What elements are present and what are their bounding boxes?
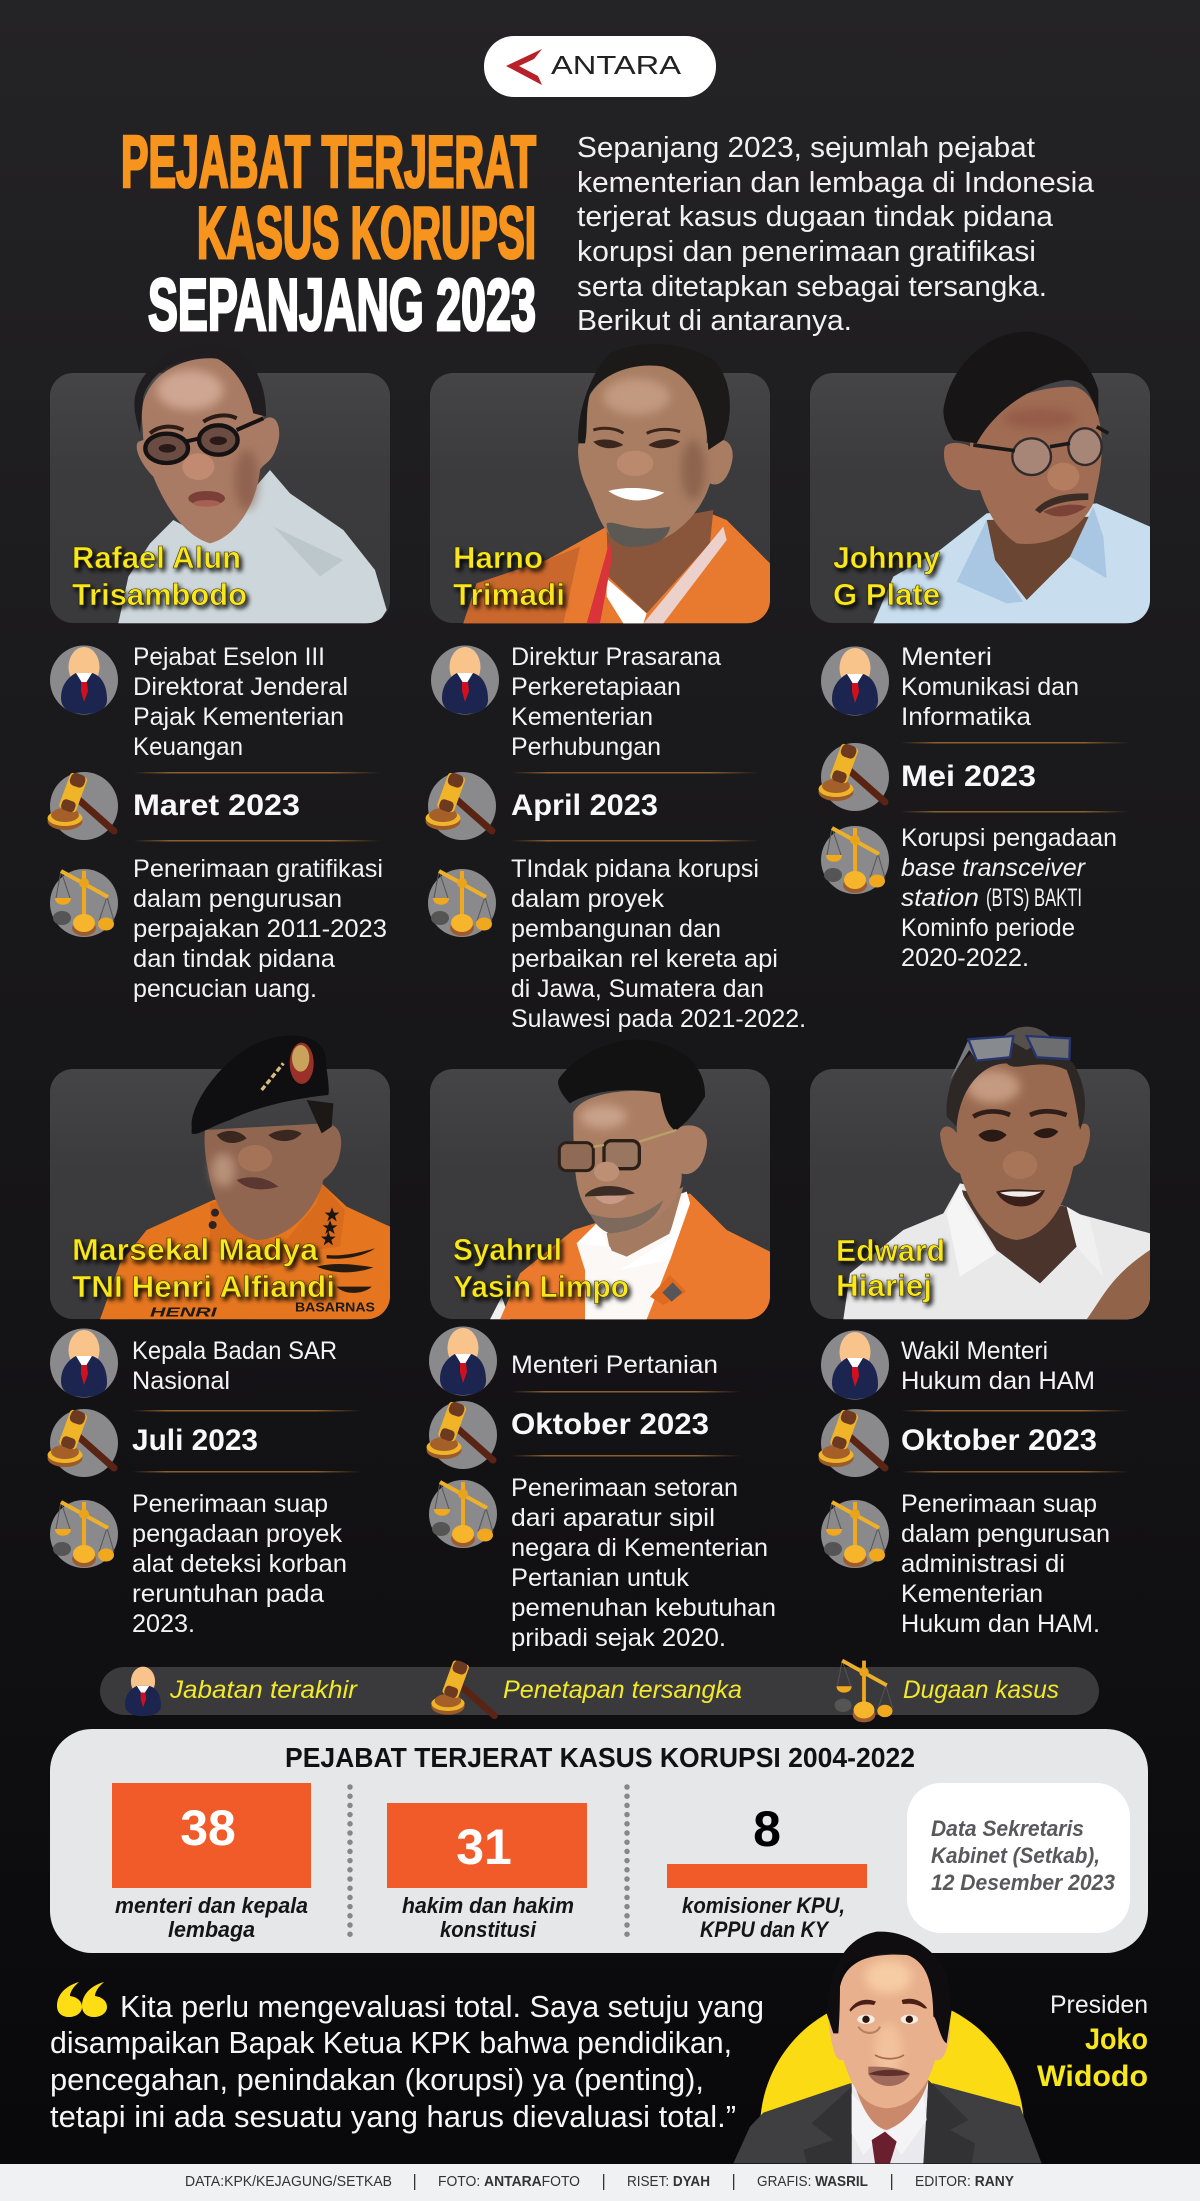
- photo: Syahrul: [490, 1069, 770, 1320]
- bar: 8: 8: [753, 1801, 781, 1857]
- bar: 31: hakim dan hakim: [402, 1893, 574, 1918]
- case: negara di Kementerian: [511, 1534, 768, 1562]
- logo: ANTARA: [484, 36, 716, 97]
- legend label: suspect: Penetapan tersangka: [503, 1676, 742, 1704]
- icon: scales: [821, 826, 889, 894]
- name: Trimadi: [453, 577, 565, 612]
- case: pribadi sejak 2020.: [511, 1624, 726, 1652]
- case: pengadaan proyek: [132, 1520, 342, 1548]
- case: [133, 855, 387, 1003]
- case: perpajakan 2011-2023: [133, 915, 387, 943]
- name: [72, 1232, 335, 1304]
- quote text: tetapi ini ada sesuatu yang harus dievaluasi total.”: [50, 2100, 736, 2134]
- date: April 2023: [511, 789, 658, 822]
- position: Nasional: [132, 1367, 230, 1395]
- title: [121, 122, 536, 346]
- intro text: terjerat kasus dugaan tindak pidana: [577, 201, 1054, 233]
- case: Penerimaan suap: [901, 1490, 1097, 1518]
- position: Pajak Kementerian: [133, 703, 344, 731]
- icon: person: [50, 1328, 118, 1398]
- position: Wakil Menteri: [901, 1337, 1048, 1365]
- case: base transceiver: [901, 854, 1087, 882]
- portrait: Joko Widodo: [734, 1932, 1042, 2164]
- case: alat deteksi korban: [132, 1550, 347, 1578]
- name: Marsekal Madya: [72, 1232, 319, 1267]
- icon: person: [821, 646, 889, 716]
- name: [453, 1232, 629, 1304]
- icon: gavel: [426, 1400, 497, 1469]
- icon: scales: [50, 1500, 118, 1568]
- name: [72, 540, 247, 612]
- name: Johnny: [833, 540, 941, 575]
- details: Harno: [426, 643, 806, 1033]
- name: Yasin Limpo: [453, 1269, 629, 1304]
- details: Syahrul: [426, 1326, 776, 1652]
- position: Kepala Badan SAR: [132, 1337, 337, 1365]
- icon: gavel: [48, 771, 118, 840]
- name: [836, 1233, 945, 1303]
- panel: Johnny G Plate: [810, 332, 1150, 623]
- case: [132, 1490, 347, 1638]
- icon: gavel: [426, 771, 496, 840]
- icon: person: [821, 1330, 889, 1400]
- title: SEPANJANG 2023: [148, 265, 536, 346]
- bar: 38: 38: [180, 1800, 236, 1856]
- card background: [50, 373, 390, 623]
- case: dalam pengurusan: [133, 885, 342, 913]
- details: Johnny: [818, 643, 1129, 972]
- quote text: pencegahan, penindakan (korupsi) ya (penting),: [50, 2063, 704, 2097]
- date: Oktober 2023: [901, 1424, 1097, 1457]
- position: Direktorat Jenderal: [133, 673, 348, 701]
- icon: quote mark: [57, 1982, 107, 2017]
- case: pencucian uang.: [133, 975, 317, 1003]
- source box: Data Sekretaris: [931, 1816, 1084, 1841]
- case: pemenuhan kebutuhan: [511, 1594, 776, 1622]
- intro text: kementerian dan lembaga di Indonesia: [577, 167, 1095, 199]
- case: Penerimaan setoran: [511, 1474, 738, 1502]
- footer credits: RISET: DYAH: [627, 2174, 710, 2190]
- position: Perhubungan: [511, 733, 661, 761]
- icon: person: [429, 1326, 497, 1396]
- case: Penerimaan suap: [132, 1490, 328, 1518]
- position: Pejabat Eselon III: [133, 643, 325, 671]
- logo: ANTARA: ANTARA: [551, 50, 682, 80]
- icon: scales: [821, 1500, 889, 1568]
- name: Rafael Alun: [72, 540, 241, 575]
- bar: 8: KPPU dan KY: [700, 1917, 830, 1942]
- panel: Harno Trimadi: [430, 344, 770, 623]
- bar: 31: konstitusi: [440, 1917, 537, 1942]
- photo: Edward: [843, 1027, 1150, 1319]
- case: station: [901, 884, 979, 912]
- case: Hukum dan HAM.: [901, 1610, 1100, 1638]
- card background: [810, 1069, 1150, 1319]
- position: Informatika: [901, 703, 1031, 731]
- source box: [907, 1783, 1130, 1933]
- case: Kominfo periode: [901, 914, 1075, 942]
- icon: scales: [429, 1480, 497, 1548]
- panel: Henri Alfiandi: [50, 1036, 390, 1320]
- position: [901, 643, 1079, 731]
- icon: scales: [428, 869, 496, 937]
- case: 2020-2022.: [901, 944, 1029, 972]
- bar: 38: menteri dan kepala: [115, 1893, 308, 1918]
- intro text: serta ditetapkan sebagai tersangka.: [577, 271, 1047, 303]
- panel: Rafael Alun Trisambodo: [50, 343, 390, 623]
- card background: [810, 373, 1150, 623]
- case: Penerimaan gratifikasi: [133, 855, 383, 883]
- date: Mei 2023: [901, 760, 1036, 793]
- card background: [430, 373, 770, 623]
- case: perbaikan rel kereta api: [511, 945, 778, 973]
- name: Hiariej: [836, 1268, 932, 1303]
- legend icon: scales: [835, 1661, 892, 1722]
- icon: scales: [50, 869, 118, 937]
- name: TNI Henri Alfiandi: [72, 1269, 335, 1304]
- position: Komunikasi dan: [901, 673, 1079, 701]
- photo: Henri: BASARNAS: [295, 1301, 375, 1315]
- details: Edward: [818, 1330, 1129, 1638]
- bar: 38: [112, 1783, 311, 1942]
- name: Syahrul: [453, 1232, 562, 1267]
- icon: gavel: [818, 1408, 889, 1477]
- name: [453, 540, 565, 612]
- legend bar: [100, 1659, 1099, 1722]
- date: Maret 2023: [133, 789, 300, 822]
- position: [901, 1337, 1095, 1395]
- legend icon: person: [125, 1667, 161, 1716]
- icon: gavel: [48, 1408, 118, 1477]
- name: G Plate: [833, 577, 940, 612]
- legend label: case: Dugaan kasus: [903, 1676, 1059, 1704]
- intro text: Sepanjang 2023, sejumlah pejabat: [577, 132, 1035, 164]
- footer credits: DATA:KPK/KEJAGUNG/SETKAB: [185, 2174, 392, 2190]
- case: Kementerian: [901, 1580, 1043, 1608]
- quote text: [50, 1990, 764, 2134]
- legend label: position: Jabatan terakhir: [169, 1676, 359, 1704]
- case: dalam proyek: [511, 885, 665, 913]
- details: Rafael: [48, 643, 387, 1003]
- panel: statistics 2004-2022: [50, 1729, 1148, 1953]
- case: dari aparatur sipil: [511, 1504, 715, 1532]
- case: [511, 1474, 776, 1652]
- date: Oktober 2023: [511, 1408, 709, 1441]
- case: pembangunan dan: [511, 915, 721, 943]
- photo: Johnny: [873, 332, 1150, 623]
- position: [132, 1337, 337, 1395]
- position: [511, 643, 721, 761]
- case: Korupsi pengadaan: [901, 824, 1117, 852]
- bar: 38: lembaga: [168, 1917, 255, 1942]
- case: dalam pengurusan: [901, 1520, 1110, 1548]
- photo: Rafael: [118, 343, 387, 623]
- position: Menteri: [901, 643, 992, 671]
- source box: 12 Desember 2023: [931, 1870, 1115, 1895]
- photo: Henri: [100, 1036, 390, 1320]
- position: Perkeretapiaan: [511, 673, 681, 701]
- icon: person: [431, 646, 499, 714]
- footer credits: [0, 2164, 1200, 2201]
- speaker name: Joko: [1085, 2023, 1148, 2056]
- position: Menteri Pertanian: [511, 1351, 718, 1379]
- position: Kementerian: [511, 703, 653, 731]
- title: PEJABAT TERJERAT: [121, 122, 536, 203]
- speaker name: [1037, 1991, 1148, 2093]
- footer credits: EDITOR: RANY: [915, 2174, 1014, 2190]
- footer credits: FOTO: ANTARAFOTO: [438, 2174, 580, 2190]
- icon: gavel: [818, 742, 889, 811]
- icon: person: [50, 646, 118, 714]
- bar: 8: komisioner KPU,: [682, 1893, 845, 1918]
- position: Hukum dan HAM: [901, 1367, 1095, 1395]
- name: Harno: [453, 540, 543, 575]
- case: [901, 824, 1117, 972]
- card background: [430, 1069, 770, 1319]
- name: Edward: [836, 1233, 945, 1268]
- bar: 31: 31: [456, 1819, 512, 1875]
- panel: Edward Hiariej: [810, 1027, 1150, 1319]
- case: dan tindak pidana: [133, 945, 335, 973]
- case: 2023.: [132, 1610, 195, 1638]
- position: [133, 643, 348, 761]
- bar: 31: [387, 1803, 587, 1942]
- name: [833, 540, 941, 612]
- speaker name: Widodo: [1037, 2060, 1148, 2093]
- case: di Jawa, Sumatera dan: [511, 975, 764, 1003]
- speaker name: Presiden: [1050, 1991, 1148, 2019]
- case: [901, 1490, 1110, 1638]
- case: (BTS) BAKTI: [986, 884, 1082, 912]
- panel: Syahrul Yasin Limpo: [430, 1069, 770, 1320]
- intro text: [577, 132, 1095, 337]
- photo: Harno: [463, 344, 770, 623]
- quote text: disampaikan Bapak Ketua KPK bahwa pendidikan,: [50, 2026, 732, 2060]
- case: administrasi di: [901, 1550, 1065, 1578]
- case: reruntuhan pada: [132, 1580, 324, 1608]
- legend icon: gavel: [431, 1659, 494, 1716]
- quote text: Kita perlu mengevaluasi total. Saya setuju yang: [120, 1990, 764, 2024]
- heading: PEJABAT TERJERAT KASUS KORUPSI 2004-2022: [285, 1742, 915, 1773]
- date: Juli 2023: [132, 1424, 258, 1457]
- source box: Kabinet (Setkab),: [931, 1843, 1100, 1868]
- case: TIndak pidana korupsi: [511, 855, 759, 883]
- case: [511, 855, 806, 1033]
- photo: Henri: HENRI: [150, 1306, 217, 1320]
- footer credits: GRAFIS: WASRIL: [757, 2174, 868, 2190]
- details: Henri: [48, 1328, 362, 1638]
- bar: 8: [667, 1801, 867, 1942]
- card background: [50, 1069, 390, 1319]
- position: Keuangan: [133, 733, 243, 761]
- intro text: Berikut di antaranya.: [577, 305, 852, 337]
- title: KASUS KORUPSI: [197, 193, 536, 274]
- name: Trisambodo: [72, 577, 247, 612]
- case: Pertanian untuk: [511, 1564, 690, 1592]
- intro text: korupsi dan penerimaan gratifikasi: [577, 236, 1036, 268]
- case: Sulawesi pada 2021-2022.: [511, 1005, 806, 1033]
- position: Direktur Prasarana: [511, 643, 721, 671]
